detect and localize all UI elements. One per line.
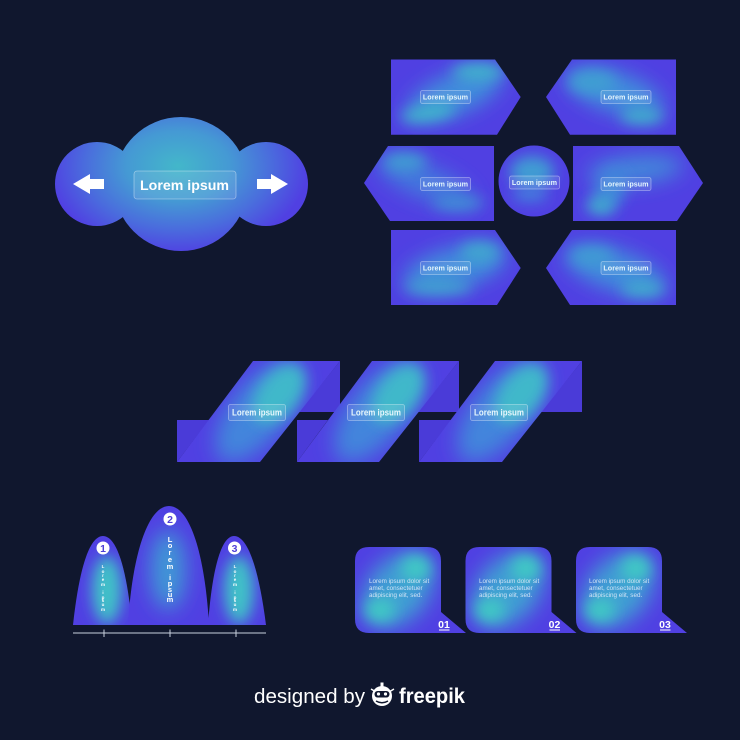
bell 2: Lorem ipsum [167, 535, 174, 604]
number badge 3: 3 [232, 543, 238, 555]
panel: arrow blocks [364, 57, 703, 305]
block: top left [391, 57, 521, 135]
card 03: adipiscing elit, sed. [589, 592, 642, 599]
block: middle right: Lorem ipsum [603, 180, 649, 188]
card 01: 01 [438, 619, 450, 631]
card 03: 03 [659, 619, 671, 631]
block: middle left [364, 146, 494, 221]
block: center circle [498, 146, 570, 216]
panel: cloud with arrows [55, 117, 308, 251]
card 03 [576, 547, 687, 633]
footer: freepik credit [254, 682, 465, 708]
block: middle right [573, 146, 703, 221]
card 02 [466, 547, 576, 633]
icon: left arrow [73, 174, 104, 194]
card 02: adipiscing elit, sed. [479, 592, 532, 599]
ribbon 1: Lorem ipsum [232, 408, 282, 418]
block: top left: Lorem ipsum [423, 92, 468, 102]
cloud label [134, 171, 236, 199]
ribbon 3 [419, 361, 582, 462]
cloud label: Lorem ipsum [140, 178, 229, 193]
card 02: amet, consectetuer [479, 585, 533, 592]
icon: right arrow [257, 174, 288, 194]
credit text: designed by [254, 685, 366, 708]
panel: bell chart [73, 506, 266, 637]
card 03: amet, consectetuer [589, 585, 643, 592]
ribbon 2 [297, 361, 459, 462]
ribbon 1 [177, 361, 340, 462]
icon: freepik mascot [371, 682, 394, 706]
block: bottom left: Lorem ipsum [423, 264, 468, 272]
block: bottom left [391, 230, 521, 305]
bell 1 [73, 536, 132, 625]
bell 3 [208, 536, 266, 625]
card 01: adipiscing elit, sed. [369, 592, 422, 599]
number badge 1: 1 [100, 543, 106, 555]
card 01 [355, 547, 466, 633]
number badge 1 [96, 542, 110, 555]
block: center circle: Lorem ipsum [512, 178, 557, 187]
block: top right [546, 58, 676, 135]
number badge 2: 2 [167, 514, 173, 526]
card 01: amet, consectetuer [369, 585, 423, 592]
ribbon 3: Lorem ipsum [474, 408, 524, 418]
cloud shape [55, 117, 308, 251]
ribbon 2: Lorem ipsum [351, 408, 401, 418]
brand name: freepik [399, 685, 465, 708]
bell 1: Lorem ipsum [101, 564, 105, 612]
block: top right: Lorem ipsum [603, 92, 649, 102]
card 02: 02 [549, 619, 560, 631]
bell 3: Lorem ipsum [233, 564, 237, 612]
card 01: Lorem ipsum dolor sit [369, 578, 429, 585]
block: middle left: Lorem ipsum [423, 180, 468, 188]
bell 2 [128, 506, 209, 625]
axis [73, 630, 266, 637]
number badge 2 [164, 512, 176, 526]
block: bottom right: Lorem ipsum [603, 264, 649, 272]
card 03: Lorem ipsum dolor sit [589, 578, 649, 585]
panel: folded ribbons [177, 361, 582, 462]
panel: speech cards [355, 547, 687, 633]
card 02: Lorem ipsum dolor sit [479, 578, 539, 585]
block: bottom right [546, 230, 676, 305]
number badge 3 [228, 542, 241, 555]
